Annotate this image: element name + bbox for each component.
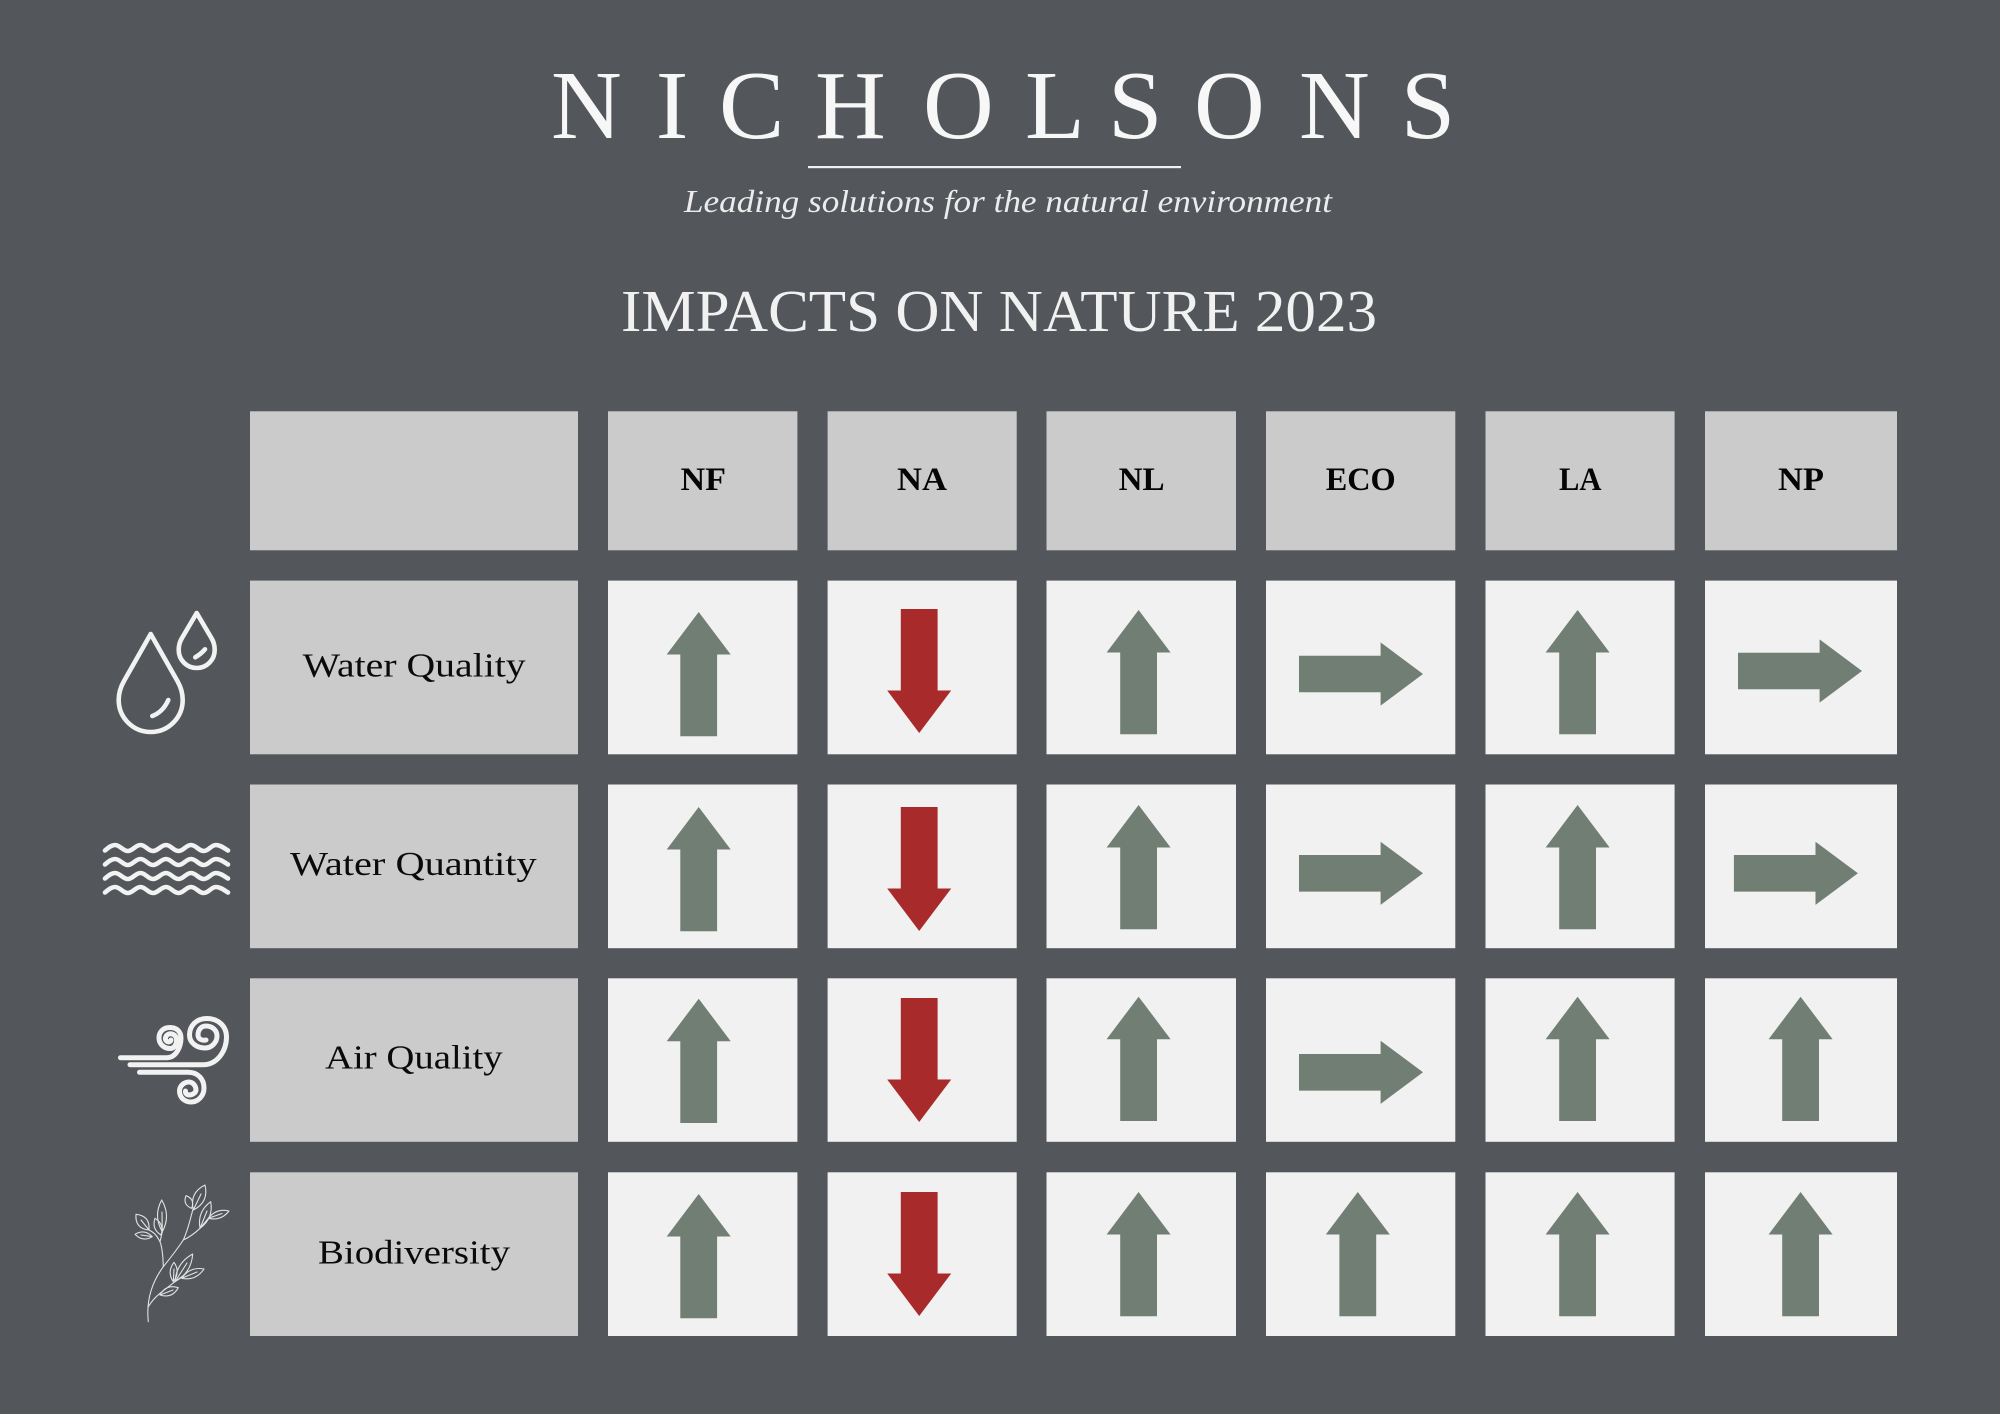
- row label: Biodiversity: [250, 1172, 578, 1336]
- cell: Water Quantity NF up arrow: [608, 784, 797, 948]
- cell: Air Quality NL up arrow: [1046, 978, 1236, 1142]
- cell: Water Quantity NA down arrow: [828, 784, 1017, 948]
- icon: wind swirls: [120, 1018, 226, 1102]
- row label: Water Quantity: Water Quantity: [290, 846, 537, 883]
- column header: NP: NP: [1778, 462, 1824, 498]
- cell: Air Quality NA down arrow: [828, 978, 1017, 1142]
- icon: water drops: [119, 613, 215, 732]
- cell: Air Quality ECO right arrow: [1266, 978, 1455, 1142]
- row label: Water Quantity: [250, 784, 578, 948]
- row label: Biodiversity: Biodiversity: [318, 1234, 510, 1271]
- cell: Water Quantity NL up arrow: [1046, 784, 1236, 948]
- cell: Water Quality NL up arrow: [1046, 581, 1236, 754]
- cell: Water Quantity ECO right arrow: [1266, 784, 1455, 948]
- icon: leafy branch: [135, 1185, 229, 1322]
- cell: Air Quality NP up arrow: [1705, 978, 1897, 1142]
- column header: ECO: ECO: [1326, 462, 1396, 498]
- header: blank corner cell: [250, 411, 578, 550]
- cell: Water Quality LA up arrow: [1486, 581, 1675, 754]
- panel: impacts matrix: [250, 411, 1897, 1336]
- cell: Biodiversity NF up arrow: [608, 1172, 797, 1336]
- cell: Water Quality NA down arrow: [828, 581, 1017, 754]
- cell: Water Quantity LA up arrow: [1486, 784, 1675, 948]
- column header: ECO: [1266, 411, 1455, 550]
- column header: NA: [828, 411, 1017, 550]
- column header: NL: [1046, 411, 1236, 550]
- row label: Air Quality: [250, 978, 578, 1142]
- icon: water waves: [105, 845, 228, 893]
- cell: Air Quality NF up arrow: [608, 978, 797, 1142]
- cell: Air Quality LA up arrow: [1486, 978, 1675, 1142]
- cell: Water Quality ECO right arrow: [1266, 581, 1455, 754]
- cell: Biodiversity ECO up arrow: [1266, 1172, 1455, 1336]
- row label: Air Quality: Air Quality: [325, 1040, 503, 1077]
- cell: Biodiversity NA down arrow: [828, 1172, 1017, 1336]
- tagline: Leading solutions for the natural environment: [683, 183, 1333, 219]
- cell: Water Quality NP right arrow: [1705, 581, 1897, 754]
- cell: Biodiversity NP up arrow: [1705, 1172, 1897, 1336]
- cell: Biodiversity LA up arrow: [1486, 1172, 1675, 1336]
- column header: NF: NF: [680, 462, 726, 498]
- cell: Water Quantity NP right arrow: [1705, 784, 1897, 948]
- logo underline: [808, 166, 1181, 168]
- row label: Water Quality: Water Quality: [303, 648, 526, 685]
- column header: LA: LA: [1559, 462, 1602, 498]
- column header: NL: NL: [1119, 462, 1165, 498]
- title: IMPACTS ON NATURE 2023: [621, 278, 1377, 344]
- column header: LA: [1486, 411, 1675, 550]
- row label: Water Quality: [250, 581, 578, 754]
- cell: Water Quality NF up arrow: [608, 581, 797, 754]
- logo: Nicholsons wordmark: NICHOLSONS: [551, 52, 1455, 160]
- column header: NF: [608, 411, 797, 550]
- column header: NP: [1705, 411, 1897, 550]
- column header: NA: NA: [897, 462, 947, 498]
- cell: Biodiversity NL up arrow: [1046, 1172, 1236, 1336]
